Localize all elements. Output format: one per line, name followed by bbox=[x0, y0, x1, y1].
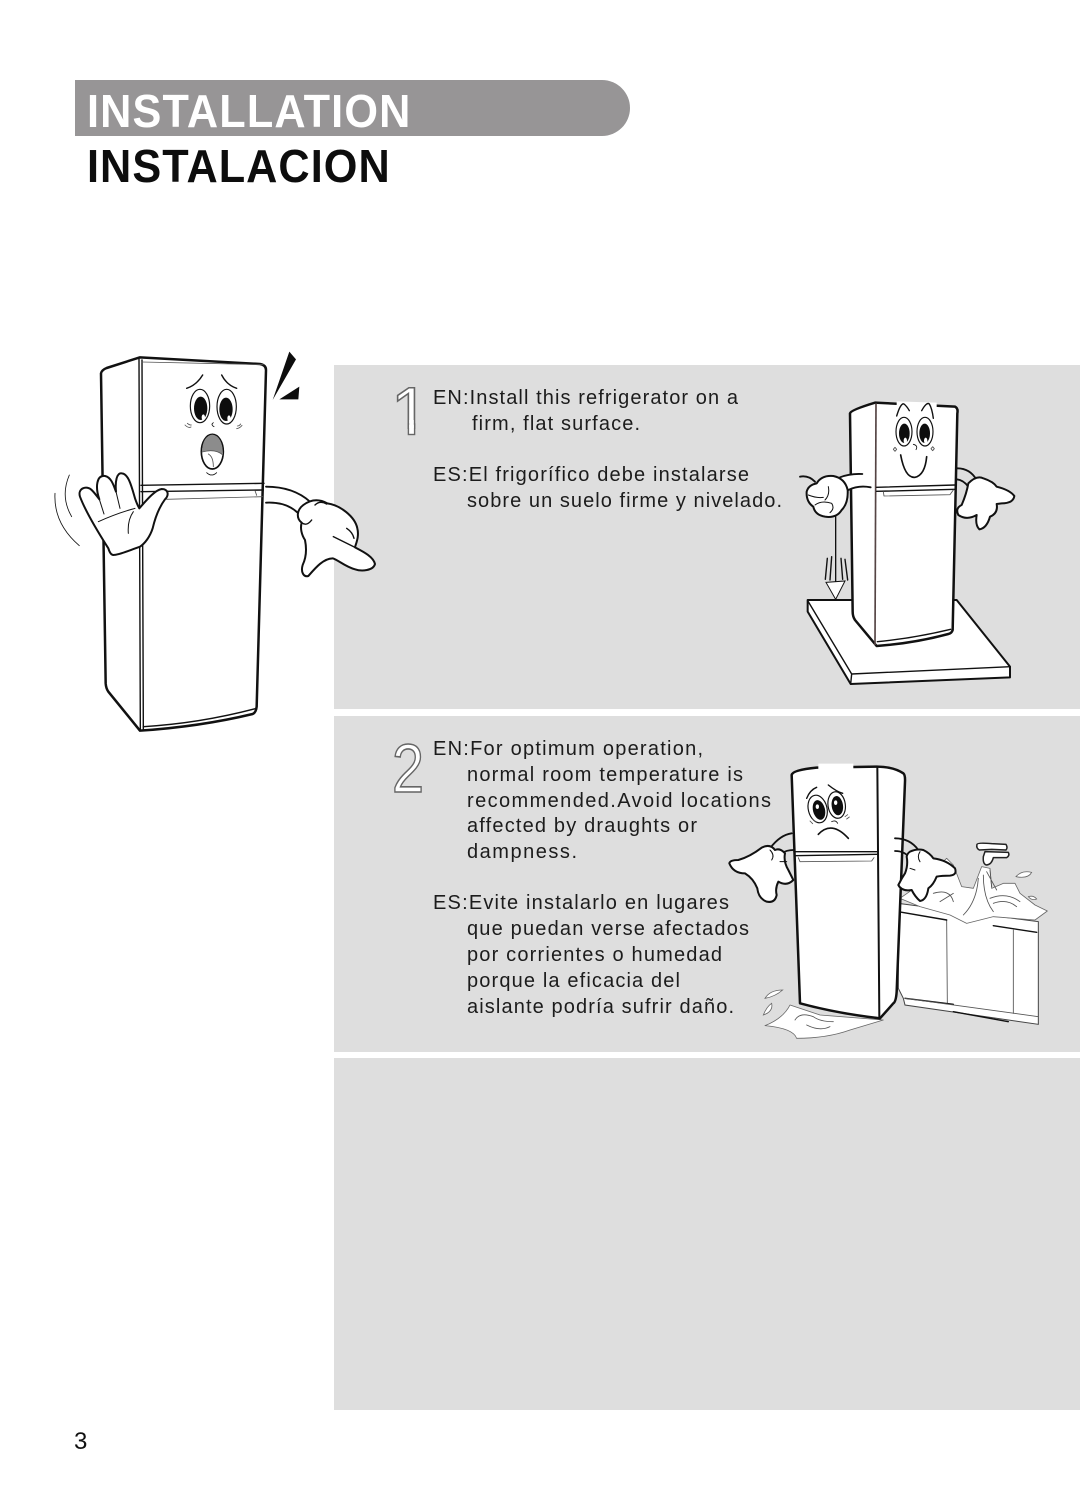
overflowing water bbox=[900, 858, 1047, 923]
step 2 text: dampness. bbox=[467, 841, 577, 863]
step 2 text bbox=[433, 738, 771, 1018]
right arm and hand bbox=[957, 468, 1014, 529]
fridge body bbox=[850, 403, 958, 646]
flat base bbox=[808, 600, 1010, 684]
face: sad bbox=[805, 785, 849, 838]
raised open hand bbox=[80, 473, 168, 555]
step 1 text: sobre un suelo firme y nivelado. bbox=[467, 490, 782, 512]
right arm and hand bbox=[895, 838, 956, 901]
fridge body bbox=[792, 764, 905, 1018]
step 1 text: firm, flat surface. bbox=[472, 413, 640, 435]
step number 1 bbox=[396, 387, 416, 436]
step 2 text: aislante podría sufrir daño. bbox=[467, 996, 734, 1018]
left arm and fist bbox=[800, 474, 871, 517]
panel: empty lower area bbox=[334, 1058, 1080, 1410]
heading: INSTALACION: INSTALACION bbox=[87, 142, 390, 192]
illustration: worried refrigerator pointing down bbox=[55, 352, 375, 731]
base top edge bbox=[808, 601, 1010, 684]
step 2 text: recommended.Avoid locations bbox=[467, 790, 771, 812]
kitchen cabinet bbox=[898, 903, 1038, 1024]
floor puddle bbox=[763, 990, 883, 1038]
motion lines bbox=[55, 475, 79, 546]
step 2 text: por corrientes o humedad bbox=[467, 944, 722, 966]
step 1 text: ES:El frigorífico debe instalarse bbox=[433, 464, 749, 486]
panel: step 1 background bbox=[334, 365, 1080, 709]
step number 2: 2 bbox=[392, 730, 424, 807]
step 1 text bbox=[433, 387, 782, 512]
panel: step 2 background bbox=[334, 716, 1080, 1052]
title bar: INSTALLATION bbox=[75, 80, 630, 137]
step 2 text: affected by draughts or bbox=[467, 815, 697, 837]
alert spikes bbox=[273, 352, 299, 400]
step number 1: 1 bbox=[391, 373, 429, 450]
plumb line and weight bbox=[825, 516, 848, 599]
step 2 text: ES:Evite instalarlo en lugares bbox=[433, 892, 729, 914]
arm and pointing hand bbox=[265, 487, 375, 576]
step 2 text: que puedan verse afectados bbox=[467, 918, 749, 940]
step 1 text: EN:Install this refrigerator on a bbox=[433, 387, 739, 409]
left arm and hand bbox=[729, 833, 793, 902]
faucet bbox=[977, 843, 1009, 865]
fridge body bbox=[101, 357, 266, 731]
title bar: INSTALLATION: INSTALLATION bbox=[87, 87, 410, 137]
step 2 text: normal room temperature is bbox=[467, 764, 743, 786]
face: smiling bbox=[893, 401, 937, 477]
page number: 3 bbox=[74, 1428, 87, 1455]
illustration: happy refrigerator on flat surface with plumb line bbox=[800, 401, 1014, 684]
step 2 text: porque la eficacia del bbox=[467, 970, 680, 992]
face: surprised bbox=[185, 375, 242, 475]
step 2 text: EN:For optimum operation, bbox=[433, 738, 703, 760]
illustration: sad refrigerator next to overflowing sink bbox=[729, 764, 1047, 1038]
